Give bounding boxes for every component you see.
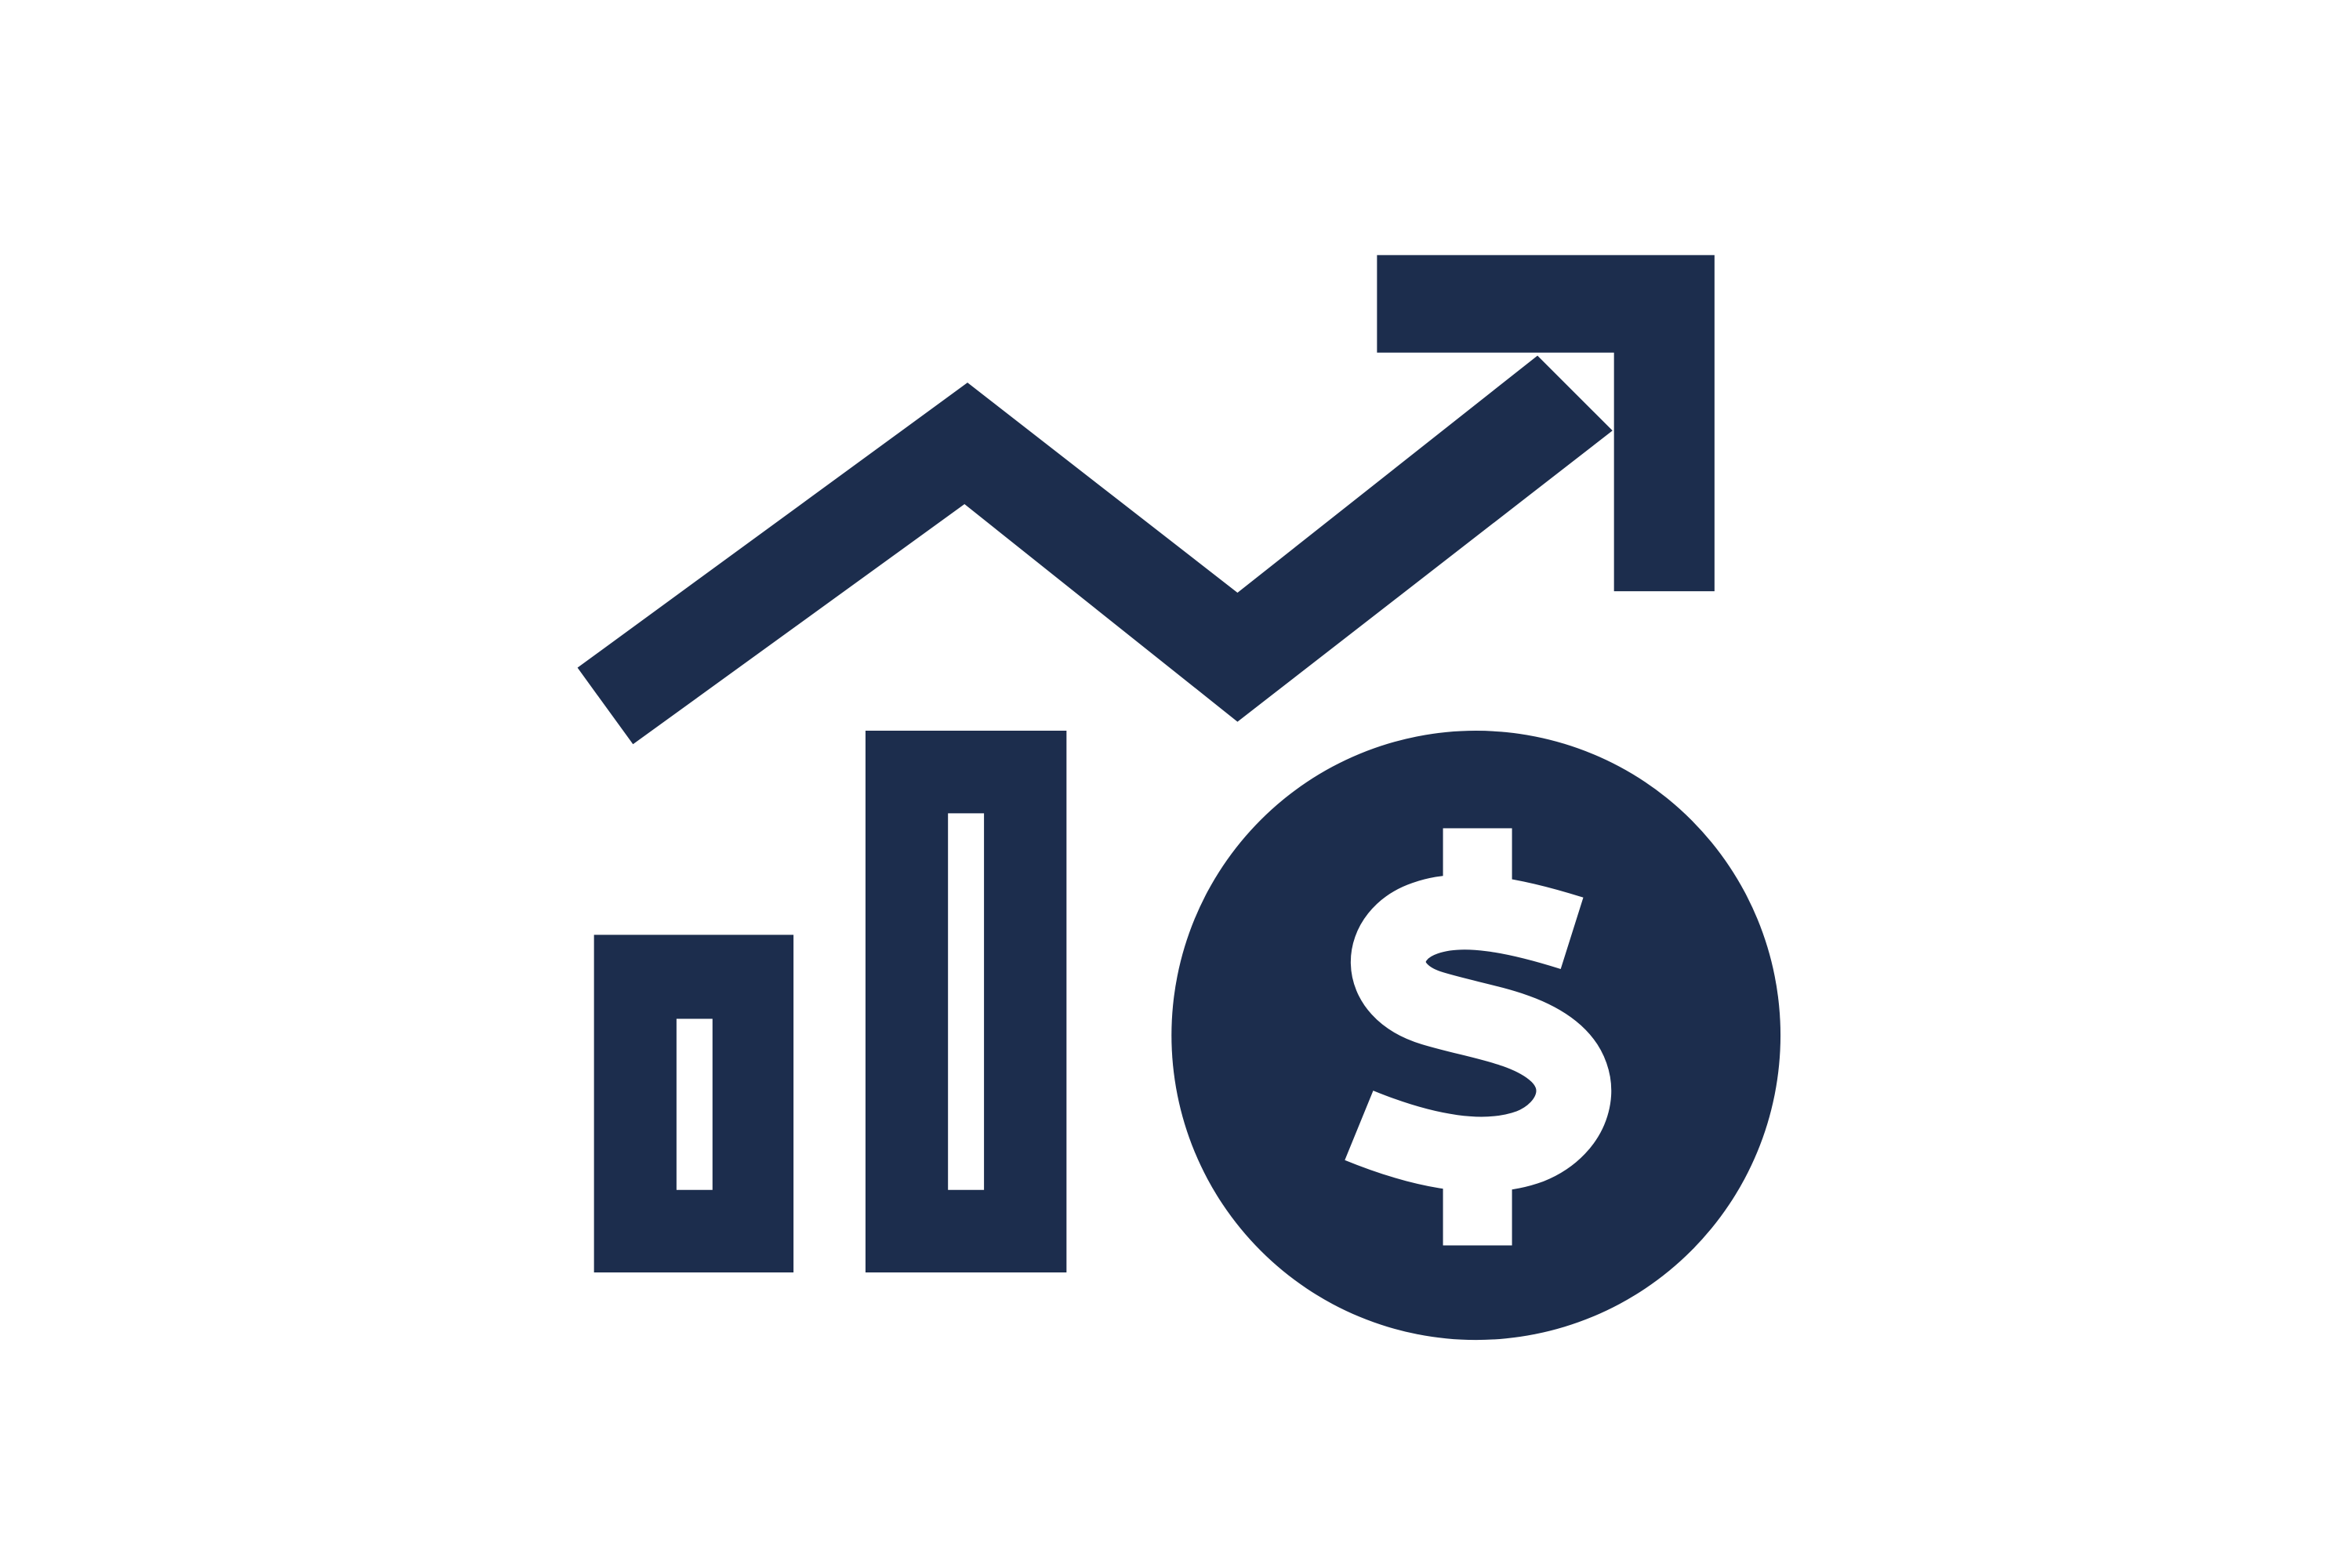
- icon: dollar coin: [1171, 731, 1780, 1340]
- bar: tall: [866, 731, 1066, 1272]
- arrow head: [1377, 255, 1715, 591]
- icon: trend line: [578, 356, 1613, 744]
- bar: short: [594, 935, 793, 1272]
- dollar sign: [1359, 828, 1573, 1246]
